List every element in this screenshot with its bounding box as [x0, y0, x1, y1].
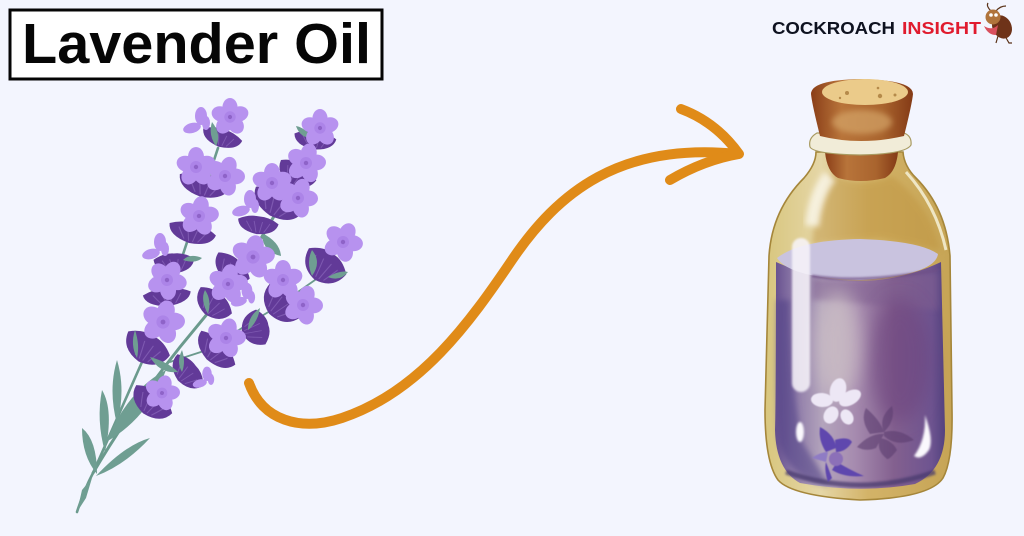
bottle lip: [810, 133, 911, 155]
liquid plum wash: [870, 298, 930, 422]
logo: Cockroach Insight: [772, 3, 1016, 43]
liquid body: [775, 262, 945, 489]
title: Lavender Oil: Lavender Oil: [22, 12, 371, 76]
long highlight: [792, 238, 810, 392]
half blossoms: [141, 107, 259, 389]
cork speckles: [839, 87, 896, 99]
flowers: [134, 98, 371, 416]
blue-violet flower: [812, 427, 864, 482]
logo: Cockroach Insight: INSIGHT: [902, 18, 981, 38]
neck cork: [825, 152, 898, 181]
icon: cockroach: [984, 3, 1016, 43]
liquid pale wash: [816, 290, 860, 400]
glass shading: [812, 172, 940, 250]
arrow: sprig to bottle: [249, 109, 739, 424]
highlight left shoulder: [812, 176, 830, 226]
white flower: [810, 376, 864, 427]
leaves: [77, 233, 281, 512]
illustration: oil bottle: [765, 79, 952, 500]
surface rim: [812, 270, 938, 279]
small sepals: [133, 122, 348, 372]
cork body: [811, 79, 913, 141]
liquid dark edge bottom: [786, 472, 935, 485]
liquid surface: [777, 239, 938, 280]
liquid dark edge left: [776, 300, 830, 486]
logo: Cockroach Insight: COCKROACH: [772, 18, 895, 38]
highlight right shoulder: [906, 172, 946, 250]
cork top: [822, 79, 908, 105]
glints: [796, 415, 931, 458]
stems: [77, 148, 315, 512]
liquid upper plum band: [812, 272, 938, 310]
dark calyxes: [118, 123, 352, 427]
cork texture: [832, 110, 892, 134]
bottle glass: [765, 152, 952, 500]
dusky flower: [857, 406, 914, 459]
illustration: lavender sprig: [77, 98, 371, 512]
